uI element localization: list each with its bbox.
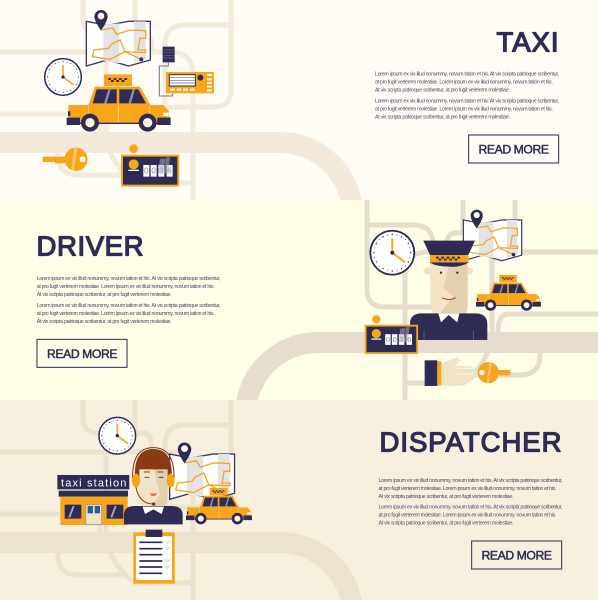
text block: taxi description: Lorem ipsum ex vix illud nonummy, novum tation et his. At vix scripta patrioque scribentur, (375, 72, 559, 78)
icon: taxi car (67, 74, 171, 132)
illustration: dispatcher with headset (124, 448, 183, 524)
illustration: taxi driver (410, 241, 487, 340)
icon: clock (99, 417, 136, 454)
icon: taxi radio (159, 47, 214, 96)
icon: key (478, 362, 510, 383)
panel: taxi (0, 0, 560, 200)
text block: taxi description: at pro fugit verterem molestiae. Lorem ipsum ex vix illud nonummy, novum tation et his. (375, 80, 553, 86)
icon: fare counter (366, 315, 417, 353)
icon: taxi car (476, 275, 541, 311)
icon: map with pin (170, 443, 235, 499)
text block: driver description: at pro fugit verterem molestiae. Lorem ipsum ex vix illud nonummy, novum tation et his. (37, 284, 215, 290)
icon: key (43, 148, 88, 171)
button: read more: READ MORE (478, 142, 549, 156)
text block: driver description: At vix scripta patrioque scribentur, at pro fugit verterem molestiae. (37, 292, 172, 298)
icon: map with pin (86, 10, 150, 66)
button: read more: READ MORE (482, 548, 552, 562)
button: read more (472, 541, 562, 569)
text block: taxi description (375, 72, 559, 120)
text block: taxi description: At vix scripta patrioque scribentur, at pro fugit verterem molestiae. (375, 88, 510, 94)
panel: dispatcher (0, 400, 598, 600)
road map background (246, 200, 598, 415)
text block: dispatcher description: At vix scripta patrioque scribentur, at pro fugit verterem molestiae. (378, 494, 514, 500)
heading: DISPATCHER: DISPATCHER (380, 426, 562, 458)
button: read more (37, 339, 127, 367)
text block: dispatcher description: at pro fugit verterem molestiae. Lorem ipsum ex vix illud nonummy, novum tation et his. (378, 486, 556, 492)
button: read more: READ MORE (47, 347, 118, 361)
heading: DRIVER: DRIVER (36, 230, 144, 262)
icon: clipboard checklist (133, 530, 175, 584)
text block: driver description: At vix scripta patrioque scribentur, at pro fugit verterem molestiae. (37, 319, 172, 325)
road map background (0, 400, 352, 600)
text block: taxi description: at pro fugit verterem molestiae. Lorem ipsum ex vix illud nonummy, novum tation et his. (375, 106, 553, 112)
text block: dispatcher description: at pro fugit verterem molestiae. Lorem ipsum ex vix illud nonummy, novum tation et his. (378, 513, 556, 519)
text block: driver description: Lorem ipsum ex vix illud nonummy, novum tation et his. At vix scripta patrioque scribentur, (37, 303, 221, 309)
text block: dispatcher description: Lorem ipsum ex vix illud nonummy, novum tation et his. At vix scripta patrioque scribentur, (378, 505, 562, 511)
text block: dispatcher description: Lorem ipsum ex vix illud nonummy, novum tation et his. At vix scripta patrioque scribentur, (378, 478, 562, 484)
heading: TAXI: TAXI (496, 26, 558, 58)
text block: taxi description: At vix scripta patrioque scribentur, at pro fugit verterem molestiae. (375, 114, 510, 120)
panel: driver (0, 200, 598, 415)
icon: clock (370, 231, 414, 275)
text block: dispatcher description (378, 478, 562, 527)
icon: hand (425, 357, 477, 386)
text block: driver description: at pro fugit verterem molestiae. Lorem ipsum ex vix illud nonummy, novum tation et his. (37, 311, 215, 317)
text block: dispatcher description: At vix scripta patrioque scribentur, at pro fugit verterem molestiae. (378, 521, 514, 527)
illustration: taxi station (57, 475, 129, 525)
text block: driver description (37, 276, 221, 325)
icon: fare counter (122, 144, 178, 186)
illustration: taxi station: taxi station (61, 477, 126, 489)
road map background (0, 0, 352, 215)
button: read more (469, 135, 559, 163)
icon: taxi car (186, 488, 252, 524)
icon: clock (45, 59, 81, 95)
text block: driver description: Lorem ipsum ex vix illud nonummy, novum tation et his. At vix scripta patrioque scribentur, (37, 276, 221, 282)
icon: map with pin (463, 210, 522, 261)
text block: taxi description: Lorem ipsum ex vix illud nonummy, novum tation et his. At vix scripta patrioque scribentur, (375, 98, 559, 104)
